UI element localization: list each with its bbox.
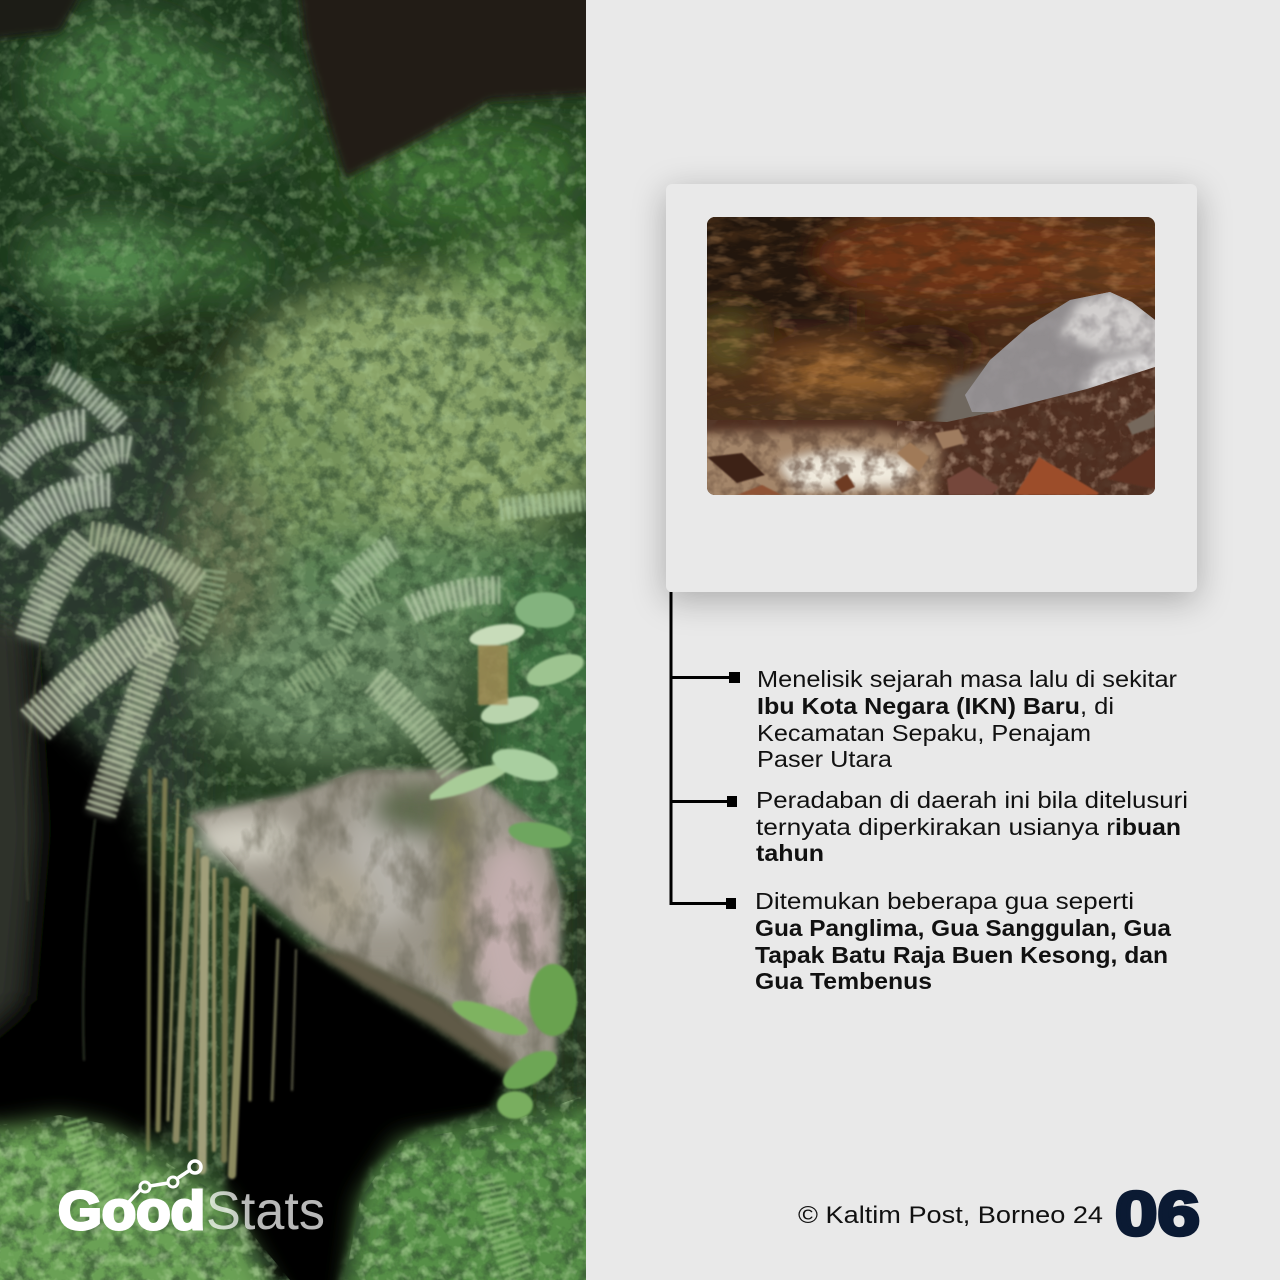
bullet text 3: Gua Tembenus xyxy=(755,968,932,994)
bullet text 1: Paser Utara xyxy=(757,746,892,772)
cave darkness, right xyxy=(225,905,508,1280)
bullet text 1 xyxy=(757,666,1177,772)
rock face xyxy=(180,740,570,1080)
bullet text 3: Gua Panglima, Gua Sanggulan, Gua xyxy=(755,915,1171,941)
bullet text 3: Tapak Batu Raja Buen Kesong, dan xyxy=(755,942,1168,968)
bullet text 1: , di xyxy=(1080,693,1114,719)
cave opening light xyxy=(965,292,1155,412)
bullet text 3: Ditemukan beberapa gua seperti xyxy=(755,888,1134,914)
bullet text 1: Menelisik sejarah masa lalu di sekitar xyxy=(757,666,1177,692)
text blocks: three bullet points xyxy=(755,666,1188,994)
footer: source credit and page number xyxy=(798,1180,1200,1245)
panel: photo card xyxy=(666,184,1197,592)
bullet text 3 xyxy=(755,888,1171,994)
floor xyxy=(707,367,1155,495)
fern fronds xyxy=(5,372,585,1280)
cave floor boulders xyxy=(707,409,1155,495)
logo icon: trend line with dots xyxy=(127,1161,201,1204)
hazy mid-ground below the opening xyxy=(928,358,992,422)
logo: GoodStats xyxy=(58,1159,325,1241)
overhanging dark rock at top xyxy=(296,0,630,178)
bullet text 1: Ibu Kota Negara (IKN) Baru xyxy=(757,693,1080,719)
right-edge leaves xyxy=(430,592,588,1119)
cave darkness, left xyxy=(0,600,180,1160)
hanging roots xyxy=(26,650,296,1175)
photo: cave interior xyxy=(707,217,1155,495)
photo: cave entrance covered in jungle foliage xyxy=(0,0,586,1280)
bottom foliage xyxy=(0,1090,640,1280)
bullet text 2: ternyata diperkirakan usianya r xyxy=(756,814,1115,840)
source credit: © Kaltim Post, Borneo 24 xyxy=(798,1202,1103,1229)
bullet text 2: Peradaban di daerah ini bila ditelusuri xyxy=(756,787,1188,813)
bullet text 2 xyxy=(756,787,1188,866)
bullet text 1: Kecamatan Sepaku, Penajam xyxy=(757,720,1091,746)
logo wordmark: Good: Good xyxy=(58,1181,205,1241)
connector: timeline branches with square bullets xyxy=(670,592,740,909)
foliage texture xyxy=(0,0,586,1280)
bullet text 2: tahun xyxy=(756,840,824,866)
bullet text 2: ibuan xyxy=(1115,814,1181,840)
logo wordmark: Stats: Stats xyxy=(206,1181,325,1241)
